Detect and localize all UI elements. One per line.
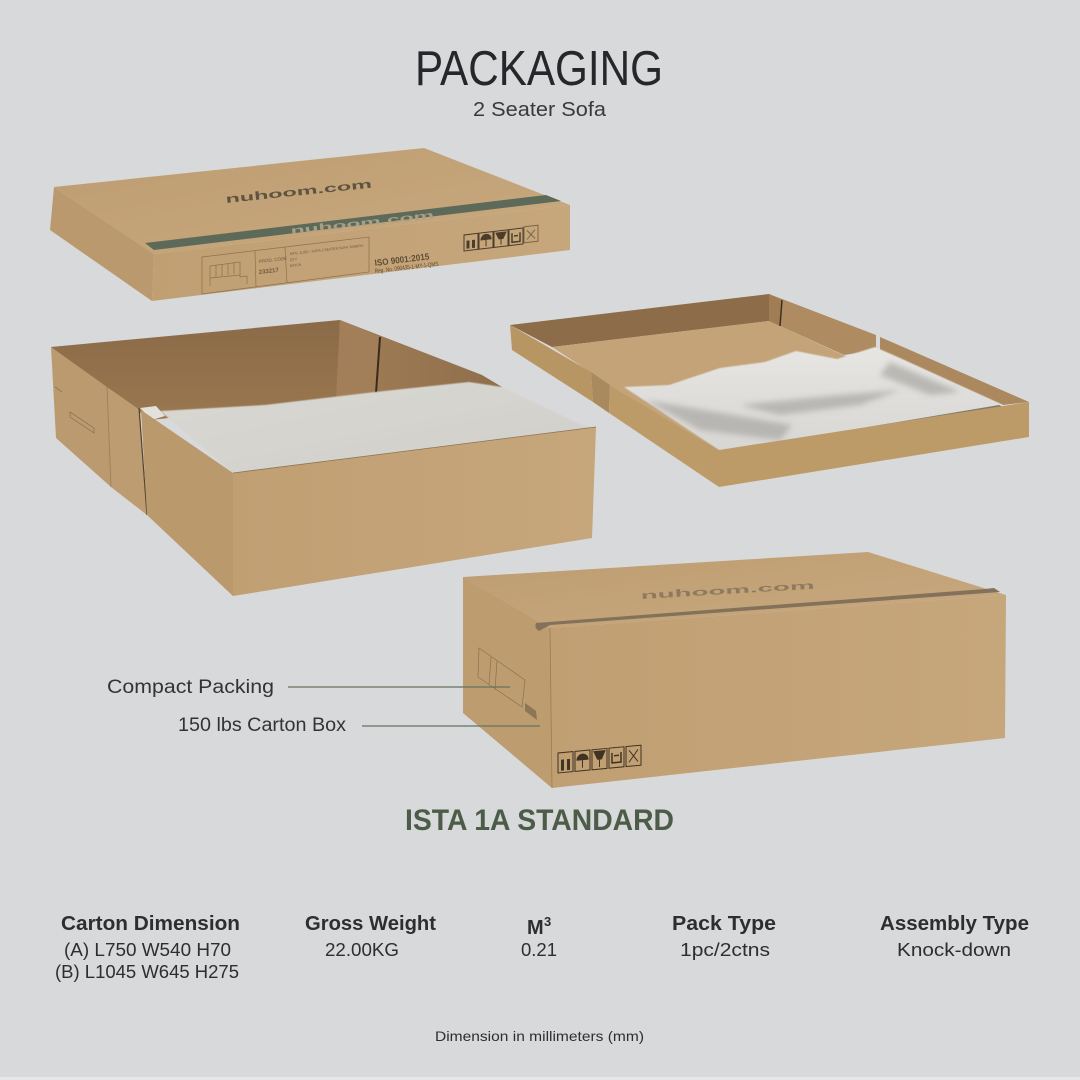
spec: gross weight: 22.00KG bbox=[325, 940, 399, 960]
sheet shadows bbox=[645, 362, 960, 440]
tray floor bbox=[552, 321, 880, 450]
tray back inner wall bbox=[510, 294, 769, 347]
spec: volume bbox=[521, 914, 557, 960]
spec: volume: 3 bbox=[544, 914, 551, 929]
spec: carton dimension bbox=[55, 913, 240, 982]
tray far-right wall bbox=[880, 337, 1029, 405]
spec: pack type bbox=[672, 913, 776, 960]
spec: assembly type: Assembly Type bbox=[880, 913, 1029, 935]
left outer wall bbox=[51, 347, 111, 487]
green strip bbox=[145, 195, 561, 250]
lid top logo: nuhoom.com bbox=[225, 177, 372, 206]
tray front wall bbox=[719, 402, 1029, 487]
product label: MFG. JUSD : SOFA 2 SEATER SOFA TAMBRA bbox=[290, 244, 364, 256]
carton left face bbox=[463, 577, 552, 788]
tray folded flap bbox=[591, 372, 610, 413]
carton front bbox=[550, 595, 1006, 788]
front wall bbox=[233, 427, 596, 596]
iso text: ISO 9001:2015 bbox=[374, 251, 430, 268]
spec: volume: M bbox=[527, 917, 544, 939]
tray corner bbox=[769, 294, 782, 326]
title: PACKAGING bbox=[415, 42, 663, 96]
right inner wall bbox=[338, 320, 502, 400]
inner wall gap bbox=[376, 337, 380, 393]
tray left wall bbox=[510, 325, 593, 402]
sheet rim shadow bbox=[731, 405, 1003, 455]
standard heading: ISTA 1A STANDARD bbox=[405, 804, 674, 837]
corner fold bbox=[336, 320, 380, 398]
sofa sketch bbox=[210, 262, 247, 286]
closed carton bbox=[463, 552, 1006, 788]
handling icons bbox=[464, 225, 538, 251]
callout: carton box: 150 lbs Carton Box bbox=[178, 715, 347, 736]
back inner wall bbox=[51, 320, 340, 420]
handling icons bbox=[558, 745, 641, 773]
spec: pack type: Pack Type bbox=[672, 913, 776, 935]
side iso text bbox=[525, 703, 537, 720]
side label bbox=[478, 648, 525, 707]
spec: pack type: 1pc/2ctns bbox=[680, 940, 770, 960]
footnote: Dimension in millimeters (mm) bbox=[435, 1028, 644, 1044]
wrapped sofa sheet bbox=[160, 382, 596, 473]
tray sheet bbox=[624, 347, 1003, 460]
spec: gross weight bbox=[305, 913, 436, 960]
strip logo: nuhoom.com bbox=[290, 210, 434, 237]
spec: volume: 0.21 bbox=[521, 940, 557, 960]
carton strip bbox=[535, 588, 1000, 631]
product label: QTY bbox=[290, 257, 298, 262]
spec: assembly type: Knock-down bbox=[897, 940, 1011, 960]
lid front face bbox=[152, 205, 570, 301]
carton logo: nuhoom.com bbox=[640, 579, 815, 602]
spec: carton dimension: (A) L750 W540 H70 bbox=[64, 940, 231, 960]
subtitle: 2 Seater Sofa bbox=[473, 99, 607, 121]
product label bbox=[202, 237, 369, 294]
side label bbox=[55, 387, 94, 433]
sheet tab bbox=[140, 406, 165, 420]
product label: PROD. CODE bbox=[259, 256, 287, 264]
carton top bbox=[463, 552, 1006, 628]
tray near-left wall bbox=[609, 385, 719, 487]
iso text bbox=[374, 251, 439, 275]
iso text: Reg. No. 090435-1-MY-1-QMS bbox=[375, 262, 439, 275]
product label: BATCH bbox=[290, 263, 302, 268]
left folded panel bbox=[107, 387, 147, 515]
spec: assembly type bbox=[880, 913, 1029, 960]
lid top face bbox=[54, 148, 570, 254]
tray right inner wall bbox=[769, 294, 876, 355]
left front wall bbox=[141, 410, 233, 596]
spec: carton dimension: (B) L1045 W645 H275 bbox=[55, 962, 239, 982]
closed flat carton (lid) bbox=[50, 148, 570, 301]
open tray with wrapped sofa bbox=[510, 294, 1029, 487]
spec: carton dimension: Carton Dimension bbox=[61, 913, 240, 935]
lid left face bbox=[50, 187, 154, 301]
open carton with wrapped sofa bbox=[51, 320, 596, 596]
product label: 233217 bbox=[259, 268, 280, 276]
callout: compact packing: Compact Packing bbox=[107, 677, 274, 698]
spec: gross weight: Gross Weight bbox=[305, 913, 436, 935]
